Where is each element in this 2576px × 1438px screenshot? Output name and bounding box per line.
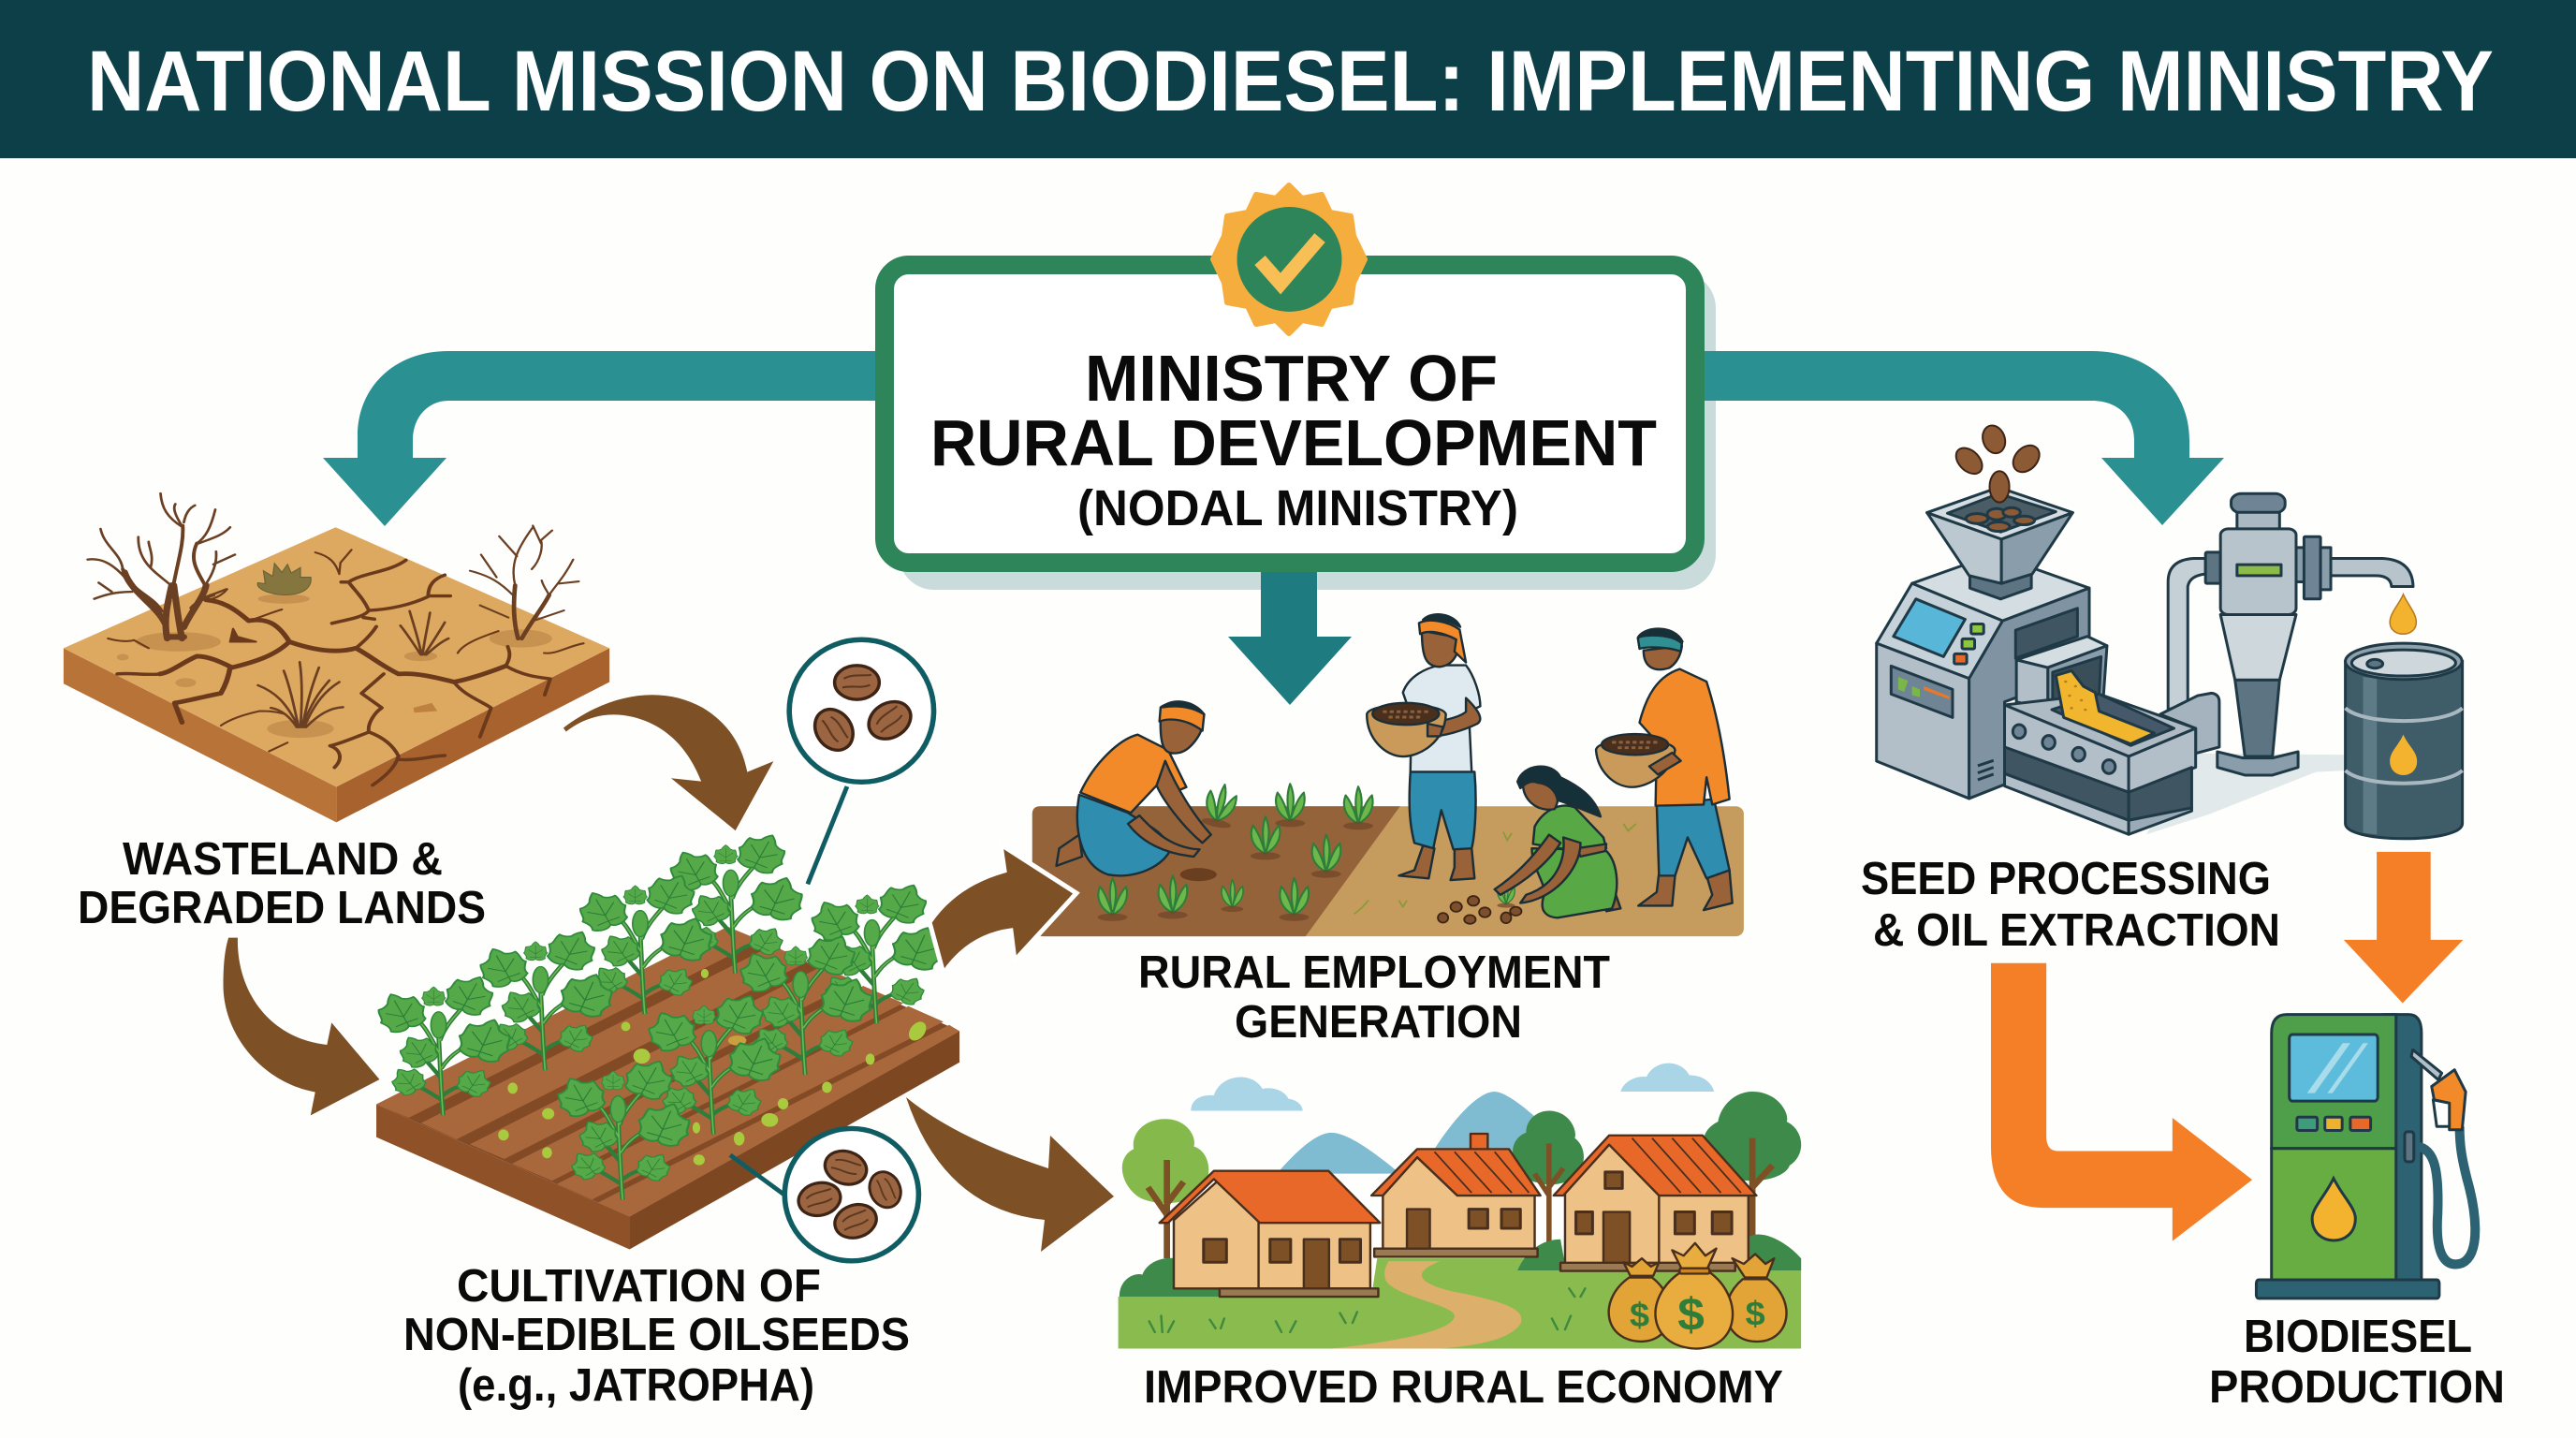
label: biodiesel production: PRODUCTION: [2209, 1362, 2505, 1413]
pump base: [2256, 1280, 2439, 1299]
label: biodiesel production: BIODIESEL: [2244, 1312, 2472, 1362]
jatropha plants: [370, 828, 952, 1199]
label: cultivation: [403, 1261, 910, 1411]
trees: [1122, 1092, 1801, 1258]
label: cultivation: NON-EDIBLE OILSEEDS: [403, 1310, 910, 1360]
money bags: $: [1630, 1296, 1649, 1334]
label: seed processing: & OIL EXTRACTION: [1873, 905, 2280, 956]
panel: wasteland and degraded lands: [64, 493, 609, 822]
grass tufts: [1149, 1288, 1585, 1332]
field seedling dots: [498, 969, 929, 1166]
dead tree left: [88, 493, 235, 638]
label: wasteland: DEGRADED LANDS: [78, 883, 486, 933]
label: rural employment: [1138, 947, 1610, 1048]
pipes: [2160, 559, 2413, 754]
arrow: cultivation to employment: [929, 844, 1076, 974]
money bags: [1609, 1243, 1787, 1349]
oil barrel: [2346, 643, 2463, 839]
money bags: $: [1677, 1289, 1705, 1341]
ministry name line 1: MINISTRY OF: [1085, 342, 1498, 415]
clouds: [1191, 1064, 1714, 1110]
fuel hose and nozzle: [2405, 1049, 2475, 1264]
seedlings: [1098, 782, 1515, 921]
house right: [1554, 1136, 1756, 1271]
extruder and conveyor: [2005, 637, 2196, 834]
arrow: ministry to wasteland: [323, 351, 875, 526]
label: rural employment: GENERATION: [1235, 997, 1522, 1048]
label: biodiesel production: [2209, 1312, 2505, 1413]
arrow: ministry to seed processing: [1705, 351, 2224, 525]
dry grass tufts: [257, 564, 448, 727]
worker woman planting: [1495, 767, 1620, 917]
bushes: [1120, 1234, 1801, 1297]
hopper: [1927, 488, 2072, 599]
arrow: cultivation to economy: [906, 1097, 1114, 1252]
field ridges: [376, 927, 959, 1217]
label: seed processing: [1861, 854, 2280, 956]
arrow: wasteland to cultivation, upper: [564, 695, 773, 830]
money bags: $: [1746, 1294, 1765, 1332]
machine body: [1877, 564, 2089, 799]
panel: improved rural economy village: [1119, 1064, 1801, 1349]
ground cracks: [108, 550, 583, 785]
path: [1331, 1261, 1521, 1349]
panel: biodiesel fuel pump: [2256, 1015, 2475, 1299]
machine floor shadow: [2146, 754, 2348, 834]
arrow: ministry to rural employment: [1228, 566, 1352, 705]
panel: ministry of rural development: [885, 265, 1695, 563]
mountains: [1277, 1092, 1566, 1181]
house left: [1160, 1171, 1380, 1297]
label: cultivation: (e.g., JATROPHA): [458, 1360, 814, 1411]
label: wasteland: WASTELAND &: [123, 834, 443, 885]
dead tree right: [470, 525, 578, 638]
label: seed processing: SEED PROCESSING: [1861, 854, 2271, 904]
label: improved rural economy: IMPROVED RURAL ECONOMY: [1144, 1362, 1783, 1413]
ministry name line 2: RURAL DEVELOPMENT: [930, 406, 1657, 479]
house middle: [1371, 1134, 1541, 1256]
soil mounds: [117, 594, 552, 738]
worker standing with basket: [1367, 614, 1480, 880]
ground: [1119, 1258, 1801, 1349]
label: cultivation: CULTIVATION OF: [457, 1261, 821, 1312]
worker kneeling: [1057, 701, 1211, 875]
field soil block: [376, 927, 959, 1250]
callout: seeds lower: [730, 1128, 918, 1261]
panel: jatropha cultivation field: [370, 639, 959, 1261]
seeds on ground: [1180, 868, 1521, 924]
arrow: extraction to biodiesel pump: [1991, 963, 2252, 1241]
label: wasteland: [78, 834, 486, 933]
arrow: barrel to biodiesel pump: [2344, 852, 2463, 1003]
title banner: [0, 0, 2576, 158]
falling seeds: [1951, 424, 2044, 503]
panel: rural employment scene: [1032, 614, 1744, 936]
cyclone separator: [2205, 493, 2331, 775]
panel: seed processing machine: [1877, 424, 2463, 839]
wasteland side faces: [64, 648, 609, 822]
wasteland top surface: [64, 527, 609, 786]
callout: seeds upper: [789, 639, 934, 884]
pump rear column: [2383, 1015, 2422, 1280]
oil drop: [2390, 594, 2416, 634]
arrow: wasteland to cultivation, lower: [224, 938, 379, 1115]
icon: approval badge: [1213, 185, 1365, 333]
worker standing in orange: [1596, 629, 1733, 910]
pump body: [2272, 1015, 2396, 1280]
employment field ground: [1032, 806, 1744, 936]
label: rural employment: RURAL EMPLOYMENT: [1138, 947, 1610, 998]
ministry panel drop shadow: [899, 272, 1716, 590]
nodal ministry subtitle: (NODAL MINISTRY): [1077, 480, 1518, 536]
